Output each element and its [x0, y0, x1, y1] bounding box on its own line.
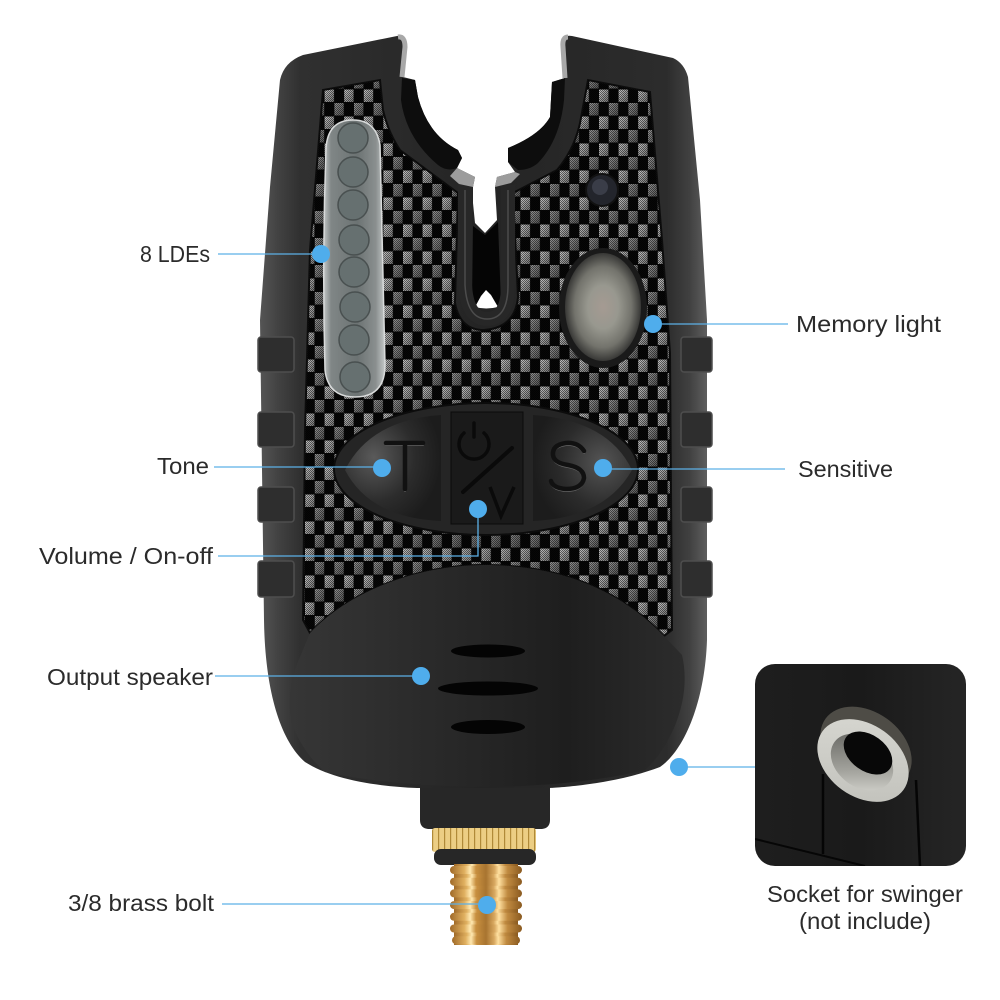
power icon [459, 423, 489, 459]
rubber line clip right [508, 78, 565, 170]
lower edge [755, 839, 865, 866]
grey rim left [450, 168, 475, 187]
side tabs right [681, 337, 712, 597]
memory light [559, 248, 647, 368]
V glyph [490, 487, 514, 516]
volume button [451, 412, 523, 524]
socket ring [817, 719, 909, 802]
callout: 8 LEDs [218, 245, 330, 263]
U-shaped slot [450, 168, 520, 319]
alarm body [260, 36, 707, 788]
rubber washer [434, 849, 536, 865]
label: volume: Volume / On-off [39, 543, 214, 569]
T button [345, 415, 441, 521]
callout: bolt [222, 896, 496, 914]
label: speaker: Output speaker [47, 664, 213, 690]
label: tone: Tone [157, 453, 209, 479]
label: bolt: 3/8 brass bolt [68, 890, 215, 916]
socket bore [844, 732, 892, 774]
callout: sensitive [594, 459, 785, 477]
S button [533, 415, 632, 521]
callout: volume [218, 500, 487, 556]
side tabs left [258, 337, 294, 597]
LED bulbs [338, 123, 370, 392]
label: sensitive: Sensitive [798, 456, 893, 482]
label: socket line 1: Socket for swinger [767, 881, 963, 907]
bolt collar [420, 786, 550, 829]
small sensor lens [586, 174, 618, 206]
speaker shell [290, 475, 685, 787]
callout: socket [670, 758, 755, 776]
rubber line clip left [401, 78, 462, 169]
ear rim left [398, 37, 405, 77]
socket recess [823, 774, 920, 866]
threaded shaft [450, 864, 522, 945]
knurled nut [432, 828, 536, 852]
LED strip [324, 120, 385, 397]
speaker slots [438, 644, 538, 734]
T glyph [386, 443, 423, 491]
grey rim right [495, 172, 520, 187]
S glyph [551, 443, 584, 491]
callout: memory light [644, 315, 788, 333]
callout: speaker [215, 667, 430, 685]
brass bolt [420, 786, 550, 945]
label: memory light: Memory light [796, 311, 942, 337]
slash [463, 448, 512, 492]
label: socket line 2: (not include) [799, 908, 931, 934]
socket metal back [820, 706, 912, 774]
socket cone [830, 734, 894, 785]
control buttons [334, 403, 638, 535]
ear rim right [563, 37, 568, 78]
socket inset photo [755, 664, 966, 866]
label: 8 LDEs: 8 LDEs [140, 241, 210, 267]
carbon fibre panel [303, 80, 672, 636]
callout: tone [214, 459, 391, 477]
